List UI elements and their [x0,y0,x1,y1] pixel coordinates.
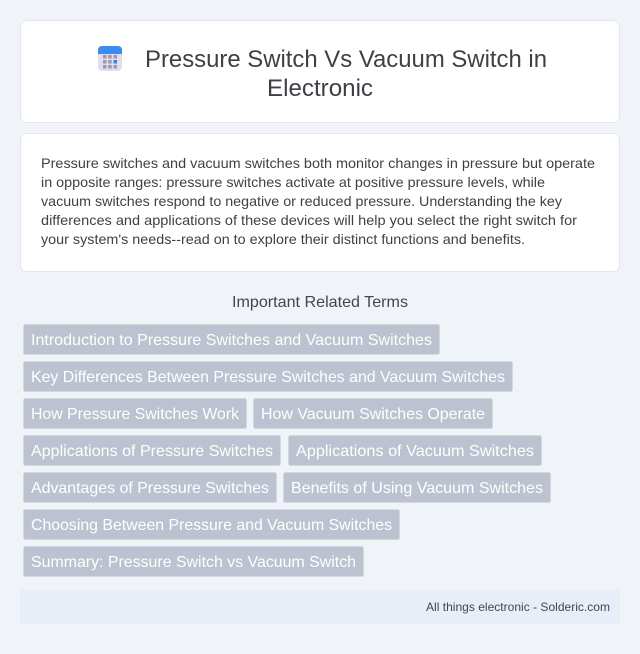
title: Electronic [267,75,373,102]
tag [24,546,364,576]
text block: introduction paragraph: your system's needs--read on to explore their distinct functions and benefits. [41,231,525,247]
panel: introduction [20,134,620,272]
tag: How Pressure Switches Work [31,406,240,423]
title [145,46,547,102]
text block: introduction paragraph [41,155,595,247]
tag [284,472,550,502]
tag [254,398,492,428]
tag [288,436,542,466]
title: Pressure Switch Vs Vacuum Switch in [145,46,547,73]
text block: introduction paragraph: vacuum switches respond to negative or reduced pressure. Understanding the key [41,193,562,209]
text block: introduction paragraph: in opposite ranges: pressure switches activate at positive pressure levels, while [41,174,545,190]
tag [24,398,246,428]
footer [20,590,620,624]
text block: introduction paragraph: differences and applications of these devices will help you select the right switch for [41,212,577,228]
icon: calendar [98,46,122,71]
panel: title card [20,20,620,122]
tag: Choosing Between Pressure and Vacuum Switches [31,517,392,534]
tag [24,472,276,502]
tag: Benefits of Using Vacuum Switches [291,480,543,497]
tag [24,362,512,392]
tag: Key Differences Between Pressure Switches and Vacuum Switches [31,369,505,386]
footer: All things electronic - Solderic.com [426,600,610,614]
tag: Summary: Pressure Switch vs Vacuum Switch [31,554,356,571]
tag: Applications of Vacuum Switches [296,443,534,460]
tag: How Vacuum Switches Operate [261,406,485,423]
text block: introduction paragraph: Pressure switches and vacuum switches both monitor changes in pressure but operate [41,155,595,171]
tag list [24,324,550,576]
tag [24,324,440,354]
tag: Advantages of Pressure Switches [31,480,269,497]
tag [24,436,280,466]
tag: Applications of Pressure Switches [31,443,273,460]
heading: important related terms: Important Related Terms [232,294,408,311]
tag [24,510,400,540]
tag: Introduction to Pressure Switches and Vacuum Switches [31,332,432,349]
